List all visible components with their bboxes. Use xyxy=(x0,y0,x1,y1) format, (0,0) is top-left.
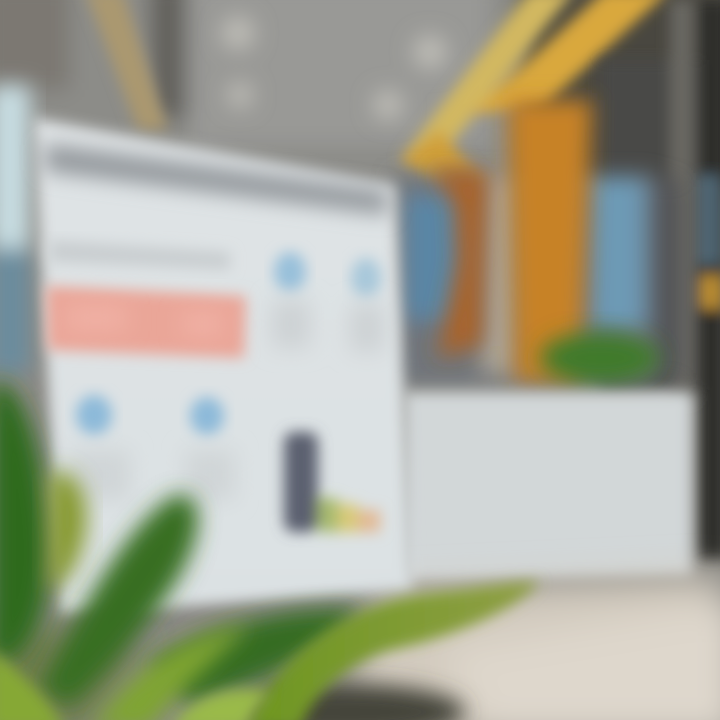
blue icon bottom 1 xyxy=(76,395,112,435)
blue icon top 1 xyxy=(274,252,306,292)
ceiling beam: tan xyxy=(85,0,168,130)
text block under top icons xyxy=(272,300,384,352)
leaf: lower dark band xyxy=(150,609,360,705)
left window xyxy=(0,85,30,373)
blue icon top 2 xyxy=(351,258,381,298)
text block under bottom icons xyxy=(70,450,235,500)
leaf: far left upright xyxy=(0,383,50,660)
leaf: mid dark xyxy=(40,495,198,705)
leaf: bottom left xyxy=(0,650,65,720)
red highlight panel xyxy=(46,286,246,358)
right dark structure xyxy=(600,0,720,560)
floor xyxy=(330,575,720,720)
foreground plant xyxy=(0,383,540,720)
leaf: left small xyxy=(48,471,87,590)
dark area behind leaves xyxy=(0,620,140,720)
dark base of plant xyxy=(235,684,465,720)
red panel text smudges xyxy=(66,305,222,336)
leaf: long bright xyxy=(245,582,540,720)
ceiling xyxy=(0,0,720,190)
ceiling beams: golden yellow xyxy=(400,0,670,190)
leaf: bottom bright xyxy=(90,625,250,720)
infographic board xyxy=(34,118,412,615)
white wall block xyxy=(405,392,692,582)
leaf: bottom centre xyxy=(170,689,270,720)
background room behind board xyxy=(395,175,680,385)
board title bar xyxy=(45,145,388,214)
blue icon bottom 2 xyxy=(190,397,224,435)
orange columns xyxy=(432,100,592,382)
bar chart xyxy=(284,432,380,532)
ceiling lights xyxy=(221,16,447,120)
green bush xyxy=(540,332,660,384)
board surface xyxy=(34,118,412,615)
subtitle text smudge xyxy=(50,240,230,270)
